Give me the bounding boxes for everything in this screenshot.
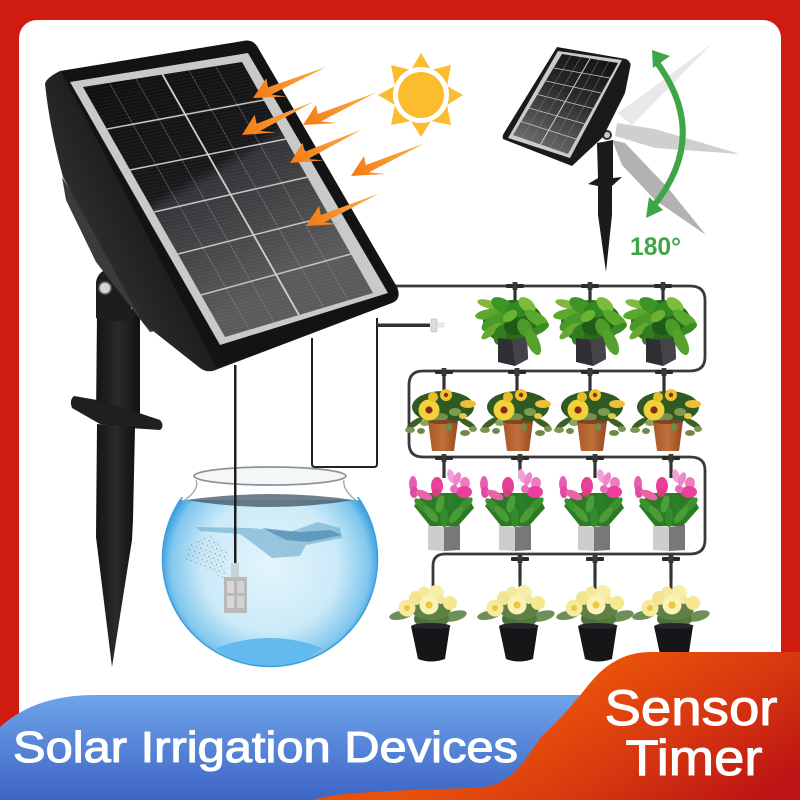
arrow 6 xyxy=(301,182,384,237)
ghost stake down xyxy=(612,140,706,235)
title: Solar Irrigation Devices xyxy=(13,723,518,772)
arrow 2 xyxy=(237,89,320,146)
arrow 3 xyxy=(298,81,381,136)
pink flower 1 xyxy=(409,468,475,551)
stake joint xyxy=(96,268,135,322)
nozzle tube xyxy=(377,319,444,332)
small grid xyxy=(521,56,610,151)
large ground stake xyxy=(71,268,162,667)
cream flower 2 xyxy=(476,585,556,662)
pink flower 4 xyxy=(634,468,700,551)
small cells xyxy=(513,54,618,154)
orange badge xyxy=(312,652,800,800)
small housing xyxy=(503,47,630,166)
panel housing xyxy=(45,41,399,371)
arrow 1 xyxy=(248,55,331,109)
pink flower 3 xyxy=(559,468,625,551)
yellow flower 3 xyxy=(554,389,626,451)
main solar panel xyxy=(45,41,399,371)
connectors row 1 xyxy=(506,282,524,306)
stake shaft xyxy=(96,305,140,420)
small white frame xyxy=(508,51,622,158)
sun ring xyxy=(393,67,449,123)
yellow flower 1 xyxy=(405,389,477,451)
water surface xyxy=(186,494,354,507)
cell grid xyxy=(107,66,351,330)
stake bolt xyxy=(99,282,111,294)
irrigation tube main line xyxy=(395,286,705,590)
solar cells xyxy=(83,62,373,337)
fish bowl with water xyxy=(160,452,380,670)
row 3 plants xyxy=(409,454,700,551)
yellow flower 4 xyxy=(630,389,702,451)
timer word: Timer xyxy=(626,730,762,786)
panel white frame xyxy=(70,53,388,345)
arrow 5 xyxy=(346,132,429,187)
cream flower 4 xyxy=(631,585,711,662)
ghost stake up xyxy=(617,43,713,125)
rotation label: 180° xyxy=(630,233,681,261)
pink flower 2 xyxy=(480,468,546,551)
sensor word: Sensor xyxy=(604,680,778,736)
sun xyxy=(378,53,463,137)
small stake xyxy=(588,131,622,272)
cream flower 3 xyxy=(555,585,635,662)
water sensor xyxy=(224,563,247,613)
ghost stake right xyxy=(615,123,740,154)
bowl rim xyxy=(194,467,346,485)
stake spike xyxy=(96,424,135,667)
connectors row 4 xyxy=(511,555,529,579)
row 4 plants xyxy=(388,555,711,662)
leafy plant 3 xyxy=(622,293,700,366)
small adjustable panel xyxy=(503,43,740,272)
bowl outline xyxy=(162,497,378,668)
connectors row 2 xyxy=(435,368,453,392)
arrow 4 xyxy=(285,117,368,174)
splash xyxy=(186,522,342,580)
cell ribs xyxy=(83,62,373,337)
rotation arrow 180 degrees xyxy=(646,50,683,218)
leafy plant 2 xyxy=(552,293,630,366)
sunlight arrows xyxy=(237,55,429,237)
panel face bezel xyxy=(61,42,397,368)
leafy plant 1 xyxy=(474,293,552,366)
tube loop to bowl xyxy=(312,318,377,467)
row 2 plants xyxy=(405,368,702,451)
stake flange xyxy=(71,396,162,430)
panel rear bracket xyxy=(62,177,160,332)
row 1 plants xyxy=(474,282,700,366)
bowl glass neck xyxy=(182,480,358,502)
yellow flower 2 xyxy=(480,389,552,451)
badge text xyxy=(604,680,778,786)
sun rays xyxy=(378,53,463,137)
sensor cable xyxy=(234,365,236,565)
connectors row 3 xyxy=(435,454,453,478)
blue title banner xyxy=(0,695,600,800)
sun disc xyxy=(398,72,444,118)
cream flower 1 xyxy=(388,585,468,662)
water body xyxy=(160,500,380,670)
deep water at bottom xyxy=(216,638,322,667)
